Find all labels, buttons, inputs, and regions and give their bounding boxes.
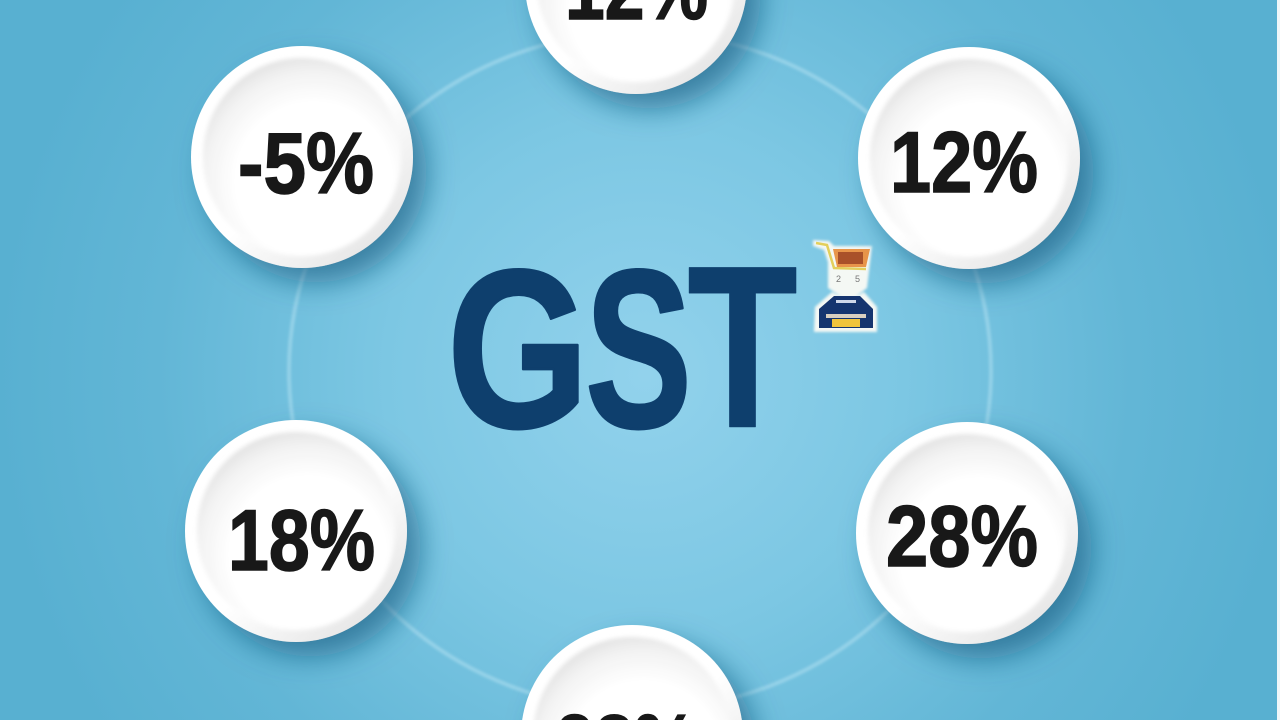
GST title: S <box>585 222 692 475</box>
cart wheel labels: 2 <box>836 274 841 284</box>
icon: shopping cart and store sticker <box>813 240 877 332</box>
badge: -5% <box>191 46 413 268</box>
badge: right 12% <box>858 47 1080 269</box>
badge: -5%: -5% <box>238 116 374 212</box>
badge: right 12%: 12% <box>890 115 1038 211</box>
GST title: T <box>687 218 798 477</box>
badge: 28% <box>856 422 1078 644</box>
badge: 18%: 18% <box>228 493 375 589</box>
badge: 18% <box>185 420 407 642</box>
GST title <box>447 218 798 477</box>
badge: 28%: 28% <box>886 489 1038 585</box>
connecting ring <box>289 32 991 710</box>
cart wheel label five: 5 <box>855 274 860 284</box>
badge: top 12% <box>525 0 747 94</box>
GST title: G <box>447 222 589 475</box>
badge: bottom 28% <box>521 625 743 720</box>
